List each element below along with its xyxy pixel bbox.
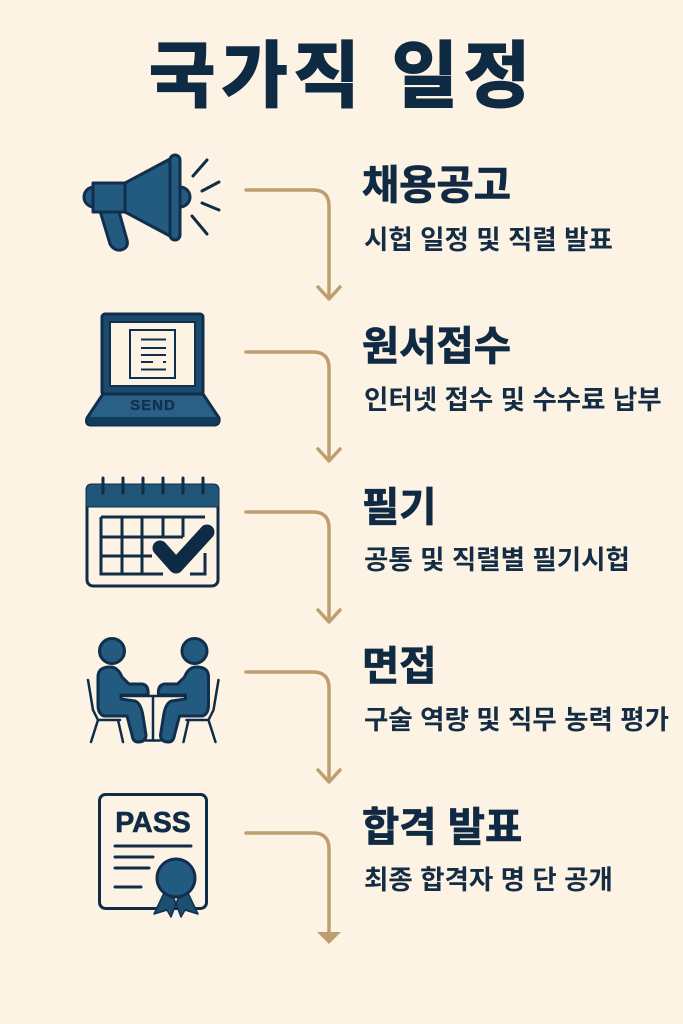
icon: two people at table: [88, 638, 218, 742]
arrow: [246, 352, 340, 461]
description: 시헙 일정 및 직렬 발표: [364, 225, 613, 255]
step 4: interview: [88, 638, 669, 782]
description: 최종 합격자 명 단 공개: [364, 865, 613, 895]
arrow: [246, 672, 340, 782]
arrow: [246, 833, 341, 944]
arrow: [246, 190, 340, 299]
description: 공통 및 직렬별 필기시헙: [364, 545, 630, 575]
icon: calendar with check: [86, 478, 219, 586]
heading: 면접: [362, 643, 437, 689]
step 1: job announcement: [84, 155, 613, 299]
arrow: [246, 512, 340, 622]
title: 국가직 일정: [149, 37, 536, 117]
heading: 필기: [362, 484, 437, 530]
description: 구술 역량 및 직무 농력 평가: [364, 705, 669, 735]
step 3: written exam: [86, 478, 630, 622]
heading: 합격 발표: [362, 804, 522, 850]
icon: PASS certificate with seal: PASS: [115, 807, 191, 839]
description: 인터넷 접수 및 수수료 납부: [364, 385, 662, 415]
step 2: application: [86, 314, 662, 461]
icon: PASS certificate with seal: [100, 794, 206, 917]
step 5: result announcement: [100, 794, 613, 944]
icon: laptop with SEND: SEND: [130, 397, 176, 414]
heading: 원서접수: [362, 323, 511, 369]
heading: 채용공고: [362, 162, 511, 208]
icon: laptop with SEND: [86, 314, 219, 425]
icon: megaphone: [84, 155, 219, 250]
